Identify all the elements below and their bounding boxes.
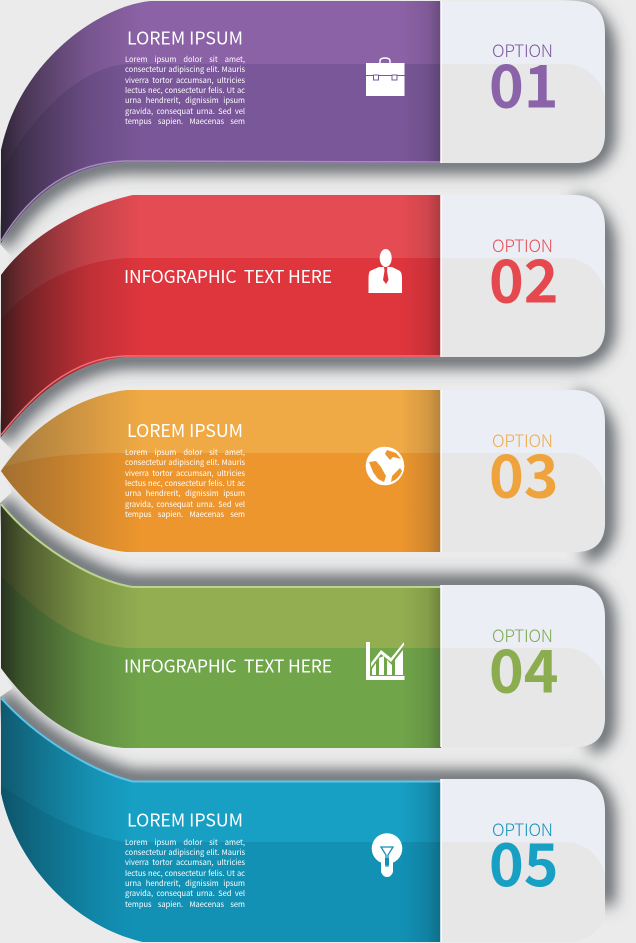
ribbon: orange bbox=[0, 385, 442, 560]
option label: OPTION bbox=[492, 816, 553, 841]
body text: urna hendrerit, dignissim ipsum bbox=[125, 878, 245, 889]
body text: gravida, consequat urna. Sed vel bbox=[125, 499, 245, 510]
body text: tempus sapien. Maecenas sem bbox=[125, 899, 245, 910]
ribbon: red bbox=[0, 190, 442, 440]
heading: LOREM IPSUM bbox=[127, 24, 243, 50]
body text: consectetur adipiscing elit. Mauris bbox=[125, 457, 245, 468]
panel: option 02 red bbox=[0, 190, 605, 440]
body text bbox=[125, 55, 246, 131]
panel: option 05 blue bbox=[0, 690, 605, 943]
body text bbox=[125, 448, 246, 524]
number: 05 bbox=[489, 818, 559, 903]
card bbox=[441, 390, 605, 552]
body text: lectus nec, consectetur felis. Ut ac bbox=[125, 868, 245, 879]
card bbox=[441, 779, 605, 942]
heading: INFOGRAPHIC TEXT HERE bbox=[124, 264, 332, 289]
option label: OPTION bbox=[492, 37, 553, 62]
option label: OPTION bbox=[492, 427, 553, 452]
body text: lectus nec, consectetur felis. Ut ac bbox=[125, 478, 245, 489]
panel: option 01 purple bbox=[0, 0, 605, 250]
heading: LOREM IPSUM bbox=[127, 417, 243, 443]
body text: lectus nec, consectetur felis. Ut ac bbox=[125, 85, 245, 96]
body text: consectetur adipiscing elit. Mauris bbox=[125, 64, 245, 75]
body text: tempus sapien. Maecenas sem bbox=[125, 116, 245, 127]
heading: LOREM IPSUM bbox=[127, 806, 243, 832]
heading: INFOGRAPHIC TEXT HERE bbox=[124, 654, 332, 678]
icon: briefcase bbox=[366, 58, 404, 96]
icon: globe bbox=[366, 447, 404, 485]
number: 03 bbox=[489, 430, 559, 514]
option label: OPTION bbox=[492, 622, 553, 647]
body text: tempus sapien. Maecenas sem bbox=[125, 509, 245, 520]
background gaps at left edge bbox=[0, 244, 13, 697]
icon: chart bbox=[366, 642, 404, 680]
body text: gravida, consequat urna. Sed vel bbox=[125, 888, 245, 899]
icon: businessman bbox=[368, 249, 402, 293]
body text: urna hendrerit, dignissim ipsum bbox=[125, 488, 245, 499]
body text: viverra tortor accumsan, ultricies bbox=[125, 468, 245, 479]
ribbon: green bbox=[0, 500, 442, 750]
body text: urna hendrerit, dignissim ipsum bbox=[125, 95, 245, 106]
body text: viverra tortor accumsan, ultricies bbox=[125, 75, 245, 86]
ribbon: blue bbox=[0, 690, 442, 943]
panel: option 04 green bbox=[0, 500, 605, 750]
option label: OPTION bbox=[492, 232, 553, 257]
body text: consectetur adipiscing elit. Mauris bbox=[125, 847, 245, 858]
body text bbox=[125, 838, 246, 914]
panel: option 03 orange bbox=[0, 385, 605, 560]
body text: gravida, consequat urna. Sed vel bbox=[125, 106, 245, 117]
number: 04 bbox=[489, 624, 559, 710]
card bbox=[441, 1, 605, 163]
card bbox=[441, 195, 605, 357]
icon: light bulb bbox=[372, 833, 402, 877]
number: 01 bbox=[489, 40, 559, 124]
ribbon: purple bbox=[0, 0, 442, 250]
body text: viverra tortor accumsan, ultricies bbox=[125, 857, 245, 868]
card bbox=[441, 585, 605, 747]
number: 02 bbox=[489, 234, 559, 320]
